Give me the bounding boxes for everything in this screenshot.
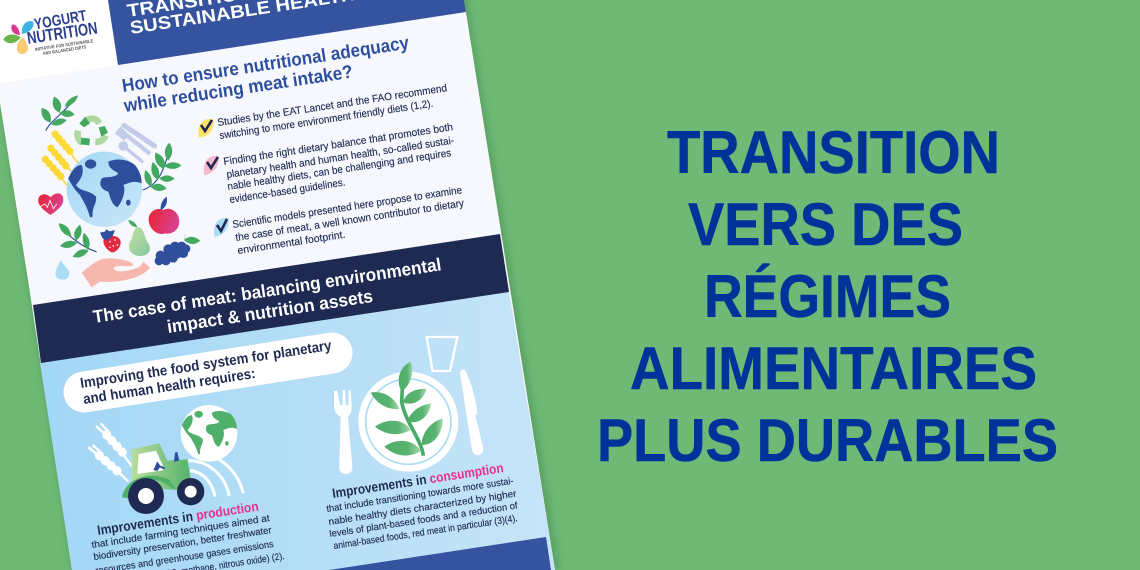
panel: sheet background — [0, 0, 555, 570]
bullet 1 line 2: switching to more environment friendly diets (1,2). — [219, 98, 434, 142]
panel: logo area — [0, 0, 118, 83]
callout pill — [79, 338, 333, 408]
icon: blue check — [214, 218, 229, 237]
consumption line 2: nable healthy diets characterized by higher — [328, 488, 518, 528]
title line 2: VERS DES — [688, 191, 963, 258]
icon: top branch — [41, 95, 78, 131]
title line 5: PLUS DURABLES — [597, 407, 1058, 474]
icon: right branch — [143, 143, 181, 191]
logo tagline: INITIATIVE FOR SUSTAINABLE — [34, 38, 93, 52]
icon: white wheat — [88, 423, 133, 482]
icon: pink check — [204, 156, 219, 175]
logo petals — [3, 21, 34, 54]
panel: header band — [108, 0, 466, 65]
icon: green globe — [181, 405, 237, 462]
heading — [120, 32, 411, 116]
logo wordmark: YOGURT — [33, 7, 88, 33]
text block: production — [91, 499, 285, 570]
icon: heart — [38, 193, 63, 215]
bullet 2 line 2: planetary health and human health, so-called sustai- — [226, 134, 455, 181]
band title line 1: The case of meat: balancing environmental — [92, 254, 443, 327]
pill shape — [84, 353, 332, 392]
panel: bottom band — [329, 537, 551, 570]
icon: strawberry — [100, 229, 121, 252]
band title — [92, 254, 443, 337]
title line 3: RÉGIMES — [704, 263, 951, 330]
title line 1: TRANSITION — [667, 119, 1000, 186]
consumption line 4: animal-based foods, red meat in particular (3)(4). — [333, 513, 518, 552]
illustration: tractor and planet — [88, 405, 243, 514]
icon: plate — [358, 372, 458, 472]
icon: grapes — [155, 235, 200, 265]
icon: yellow check — [198, 119, 214, 138]
icon: water drop — [55, 260, 69, 280]
band title line 2: impact & nutrition assets — [166, 286, 374, 337]
icon: signal arcs — [187, 450, 243, 497]
consumption line 1: that include transitioning towards more sustai- — [326, 476, 514, 515]
icon: knife — [460, 370, 483, 455]
header title — [126, 0, 433, 38]
bullet 2: Finding the right dietary balance that promotes both — [223, 121, 454, 168]
panel: infographic sheet — [0, 0, 555, 570]
illustration: planet and foods — [38, 95, 200, 287]
text block: consumption — [326, 460, 519, 552]
production heading: Improvements in production — [96, 499, 260, 538]
icon: plant — [371, 362, 443, 456]
bullet 3 line 3: environmental footprint. — [237, 229, 346, 257]
pill line 1: Improving the food system for planetary — [79, 338, 333, 392]
logo tagline line 2: AND BALANCED DIETS — [42, 44, 87, 56]
pill line 2: and human health requires: — [82, 366, 257, 408]
logo wordmark line 2: NUTRITION — [26, 19, 99, 48]
icon: recycle — [78, 117, 108, 145]
icon: apple — [149, 197, 179, 234]
title — [597, 119, 1058, 474]
icon: fork — [334, 390, 352, 474]
icon: hand — [82, 258, 150, 287]
icon: bottom branch — [59, 223, 97, 258]
icon: cutlery — [115, 125, 155, 161]
panel: light blue section — [40, 292, 555, 570]
illustration: plate and cutlery — [334, 337, 483, 474]
consumption heading: Improvements in consumption — [331, 460, 504, 501]
bullet list — [198, 82, 466, 257]
icon: globe — [67, 152, 142, 227]
icon: pear — [128, 220, 150, 256]
bullet 3 — [232, 184, 466, 257]
bullet 2 — [223, 121, 455, 206]
consumption line 3: levels of plant-based foods and a reduction of — [329, 500, 519, 540]
production line 1: that include farming techniques aimed at — [91, 513, 271, 551]
bullet 2 line 4: evidence-based guidelines. — [229, 177, 346, 206]
heading line 1: How to ensure nutritional adequacy — [120, 32, 411, 96]
bullet 1: Studies by the EAT Lancet and the FAO recommend — [217, 82, 448, 129]
bullet 3 line 2: the case of meat, a well known contributor to dietary — [235, 197, 466, 244]
bullet 3: Scientific models presented here propose to examine — [232, 184, 463, 231]
bullet 2 line 3: nable healthy diets, can be challenging and requires — [227, 147, 452, 193]
production line 2: biodiversity preservation, better freshwater — [93, 525, 273, 563]
heading line 2: while reducing meat intake? — [122, 60, 354, 116]
panel: dark band — [33, 234, 509, 363]
icon: glass — [427, 337, 457, 371]
icon: tractor — [122, 443, 204, 514]
logo — [3, 7, 99, 56]
icon: wheat — [45, 134, 78, 185]
paper shadow — [0, 0, 560, 570]
title line 4: ALIMENTAIRES — [630, 335, 1037, 402]
